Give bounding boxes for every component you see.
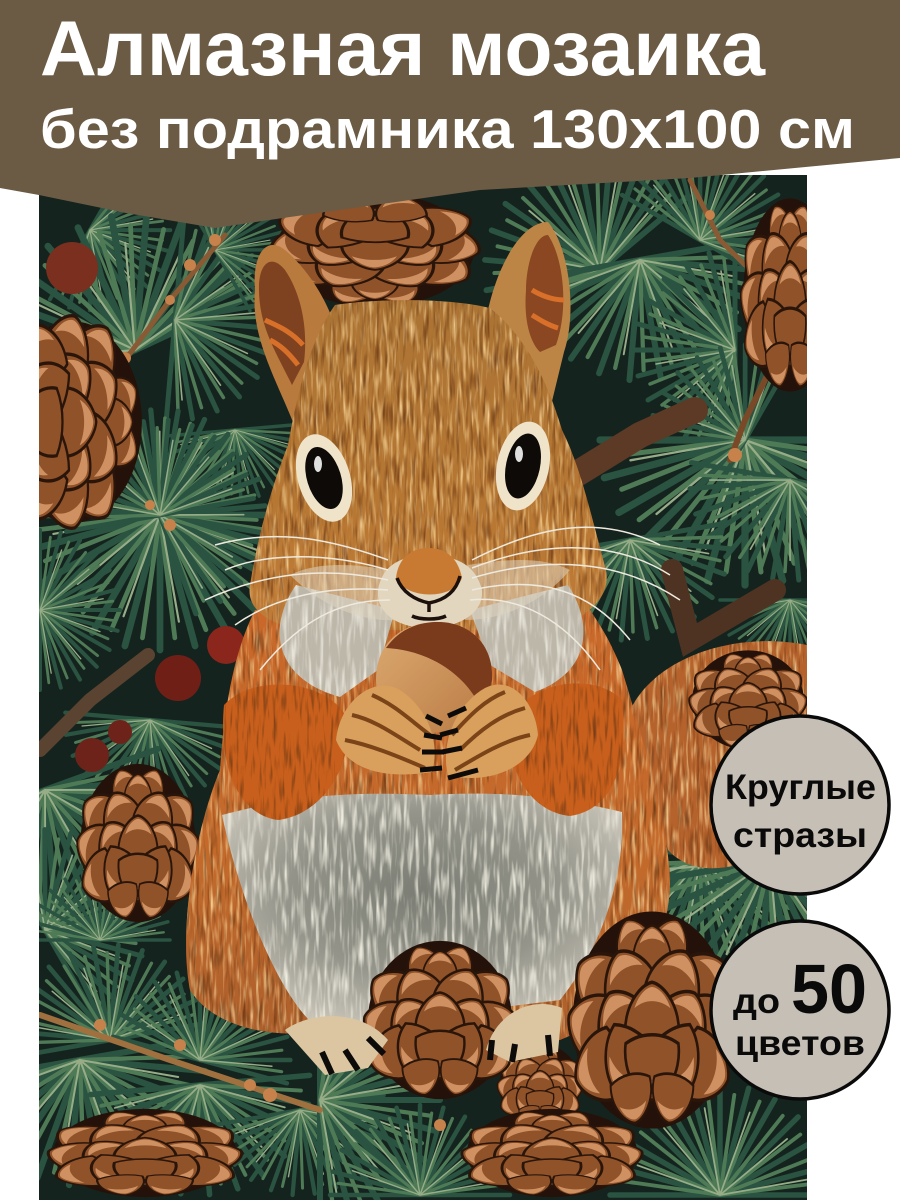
nose and mouth bbox=[397, 576, 460, 619]
badge: round rhinestones: стразы bbox=[733, 816, 867, 855]
left ear bbox=[254, 245, 330, 421]
muzzle bbox=[290, 548, 570, 628]
left arm bbox=[223, 684, 348, 820]
whiskers bbox=[205, 527, 680, 670]
right paw bbox=[440, 685, 538, 778]
eyes bbox=[296, 422, 550, 522]
right ear bbox=[488, 222, 570, 401]
squirrel tail bbox=[628, 641, 813, 868]
hazelnut bbox=[376, 622, 492, 733]
foreground pine cones bbox=[38, 910, 744, 1197]
subtitle: без подрамника 130х100 см bbox=[40, 98, 855, 160]
pine cones behind squirrel bbox=[2, 193, 845, 922]
painting: squirrel with pine cones bbox=[39, 175, 807, 1200]
squirrel body bbox=[186, 610, 670, 1040]
berries bbox=[46, 242, 245, 772]
title: Алмазная мозаика bbox=[40, 4, 766, 92]
orange pine buds bbox=[94, 210, 742, 1131]
right arm bbox=[509, 683, 624, 816]
badge: up to 50 colours: цветов bbox=[735, 1024, 865, 1063]
bottom feet with claws bbox=[285, 1004, 562, 1075]
top banner bbox=[0, 0, 900, 228]
left paw bbox=[336, 686, 444, 774]
white chest ruff bbox=[280, 585, 583, 697]
badge: round rhinestones bbox=[711, 716, 889, 894]
badge: up to 50 colours: до bbox=[733, 982, 780, 1021]
badge: round rhinestones: Круглые bbox=[725, 768, 876, 807]
tree branches bbox=[40, 180, 775, 1110]
badge: up to 50 colours bbox=[711, 921, 889, 1099]
squirrel head bbox=[250, 300, 607, 630]
badge: up to 50 colours: 50 bbox=[791, 950, 867, 1028]
pine branches background bbox=[39, 175, 807, 1200]
